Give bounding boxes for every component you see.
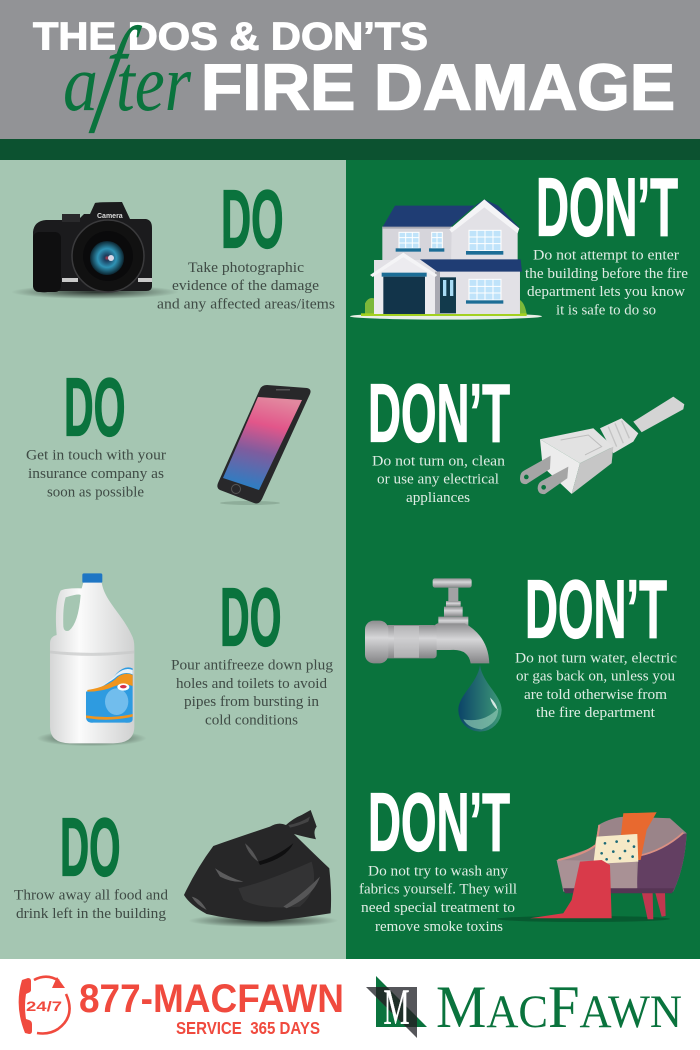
panel background: do column	[0, 160, 346, 959]
text: do not turn back on: or gas back on, unless you	[516, 668, 676, 684]
text: do not wash fabrics	[359, 864, 517, 935]
icon: camera	[11, 202, 179, 299]
icon: bottle	[37, 573, 147, 746]
text: do not turn back on	[515, 650, 678, 721]
title: THE DOS & DON’TS	[33, 16, 428, 59]
panel: don't 4 fabrics	[359, 776, 687, 935]
text: contact insurance: insurance company as	[28, 466, 164, 482]
icon: dripping faucet	[365, 578, 502, 732]
text: pour antifreeze: holes and toilets to avoid	[176, 676, 328, 692]
text: take photographic evidence: Take photographic	[188, 260, 305, 276]
logo mark	[366, 976, 427, 1038]
text: do not enter: Do not attempt to enter	[533, 248, 679, 264]
icon: 24/7 phone	[19, 977, 70, 1034]
panel: don't 1 enter building	[350, 161, 688, 320]
text: contact insurance: soon as possible	[47, 484, 144, 500]
panel: don't 2 electrical	[368, 367, 684, 506]
text: pour antifreeze: pipes from bursting in	[184, 694, 320, 710]
panel: do 3 antifreeze	[37, 571, 334, 746]
title: FIRE DAMAGE	[201, 50, 675, 124]
text: do not use appliances: Do not turn on, clean	[372, 454, 506, 470]
text: do not use appliances: or use any electrical	[377, 472, 499, 488]
text: do not wash fabrics: fabrics yourself. They will	[359, 882, 517, 898]
text: pour antifreeze	[171, 658, 334, 728]
text: do not use appliances: appliances	[406, 490, 470, 506]
icon: armchair with fabric	[497, 812, 687, 922]
text: do not wash fabrics: Do not try to wash any	[368, 864, 509, 880]
panel: do 2 insurance	[26, 361, 311, 505]
infographic canvas: DO	[60, 801, 121, 893]
icon: electrical plug	[520, 397, 684, 494]
infographic canvas: DO	[64, 361, 126, 453]
text: do not turn back on: are told otherwise from	[524, 687, 668, 703]
text: throw away food: drink left in the building	[16, 906, 167, 922]
dark green stripe	[0, 139, 700, 160]
title: a	[63, 40, 98, 128]
text: do not wash fabrics: remove smoke toxins	[375, 919, 503, 935]
text: pour antifreeze: cold conditions	[205, 712, 298, 728]
text: throw away food: Throw away all food and	[14, 888, 169, 904]
phone number text: 877-MACFAWN	[79, 977, 344, 1021]
text: do not enter: the building before the fire	[525, 266, 688, 282]
icon: garbage bag	[184, 810, 338, 927]
text: do not enter	[525, 248, 688, 318]
text: contact insurance: Get in touch with your	[26, 448, 166, 464]
title: f	[87, 2, 149, 134]
icon: smartphone	[217, 385, 311, 505]
logo wordmark: MACFAWN	[436, 974, 682, 1040]
icon: house	[350, 199, 542, 320]
icon: camera: Camera	[97, 213, 123, 220]
text: pour antifreeze: Pour antifreeze down plug	[171, 658, 334, 674]
text: throw away food	[14, 888, 169, 922]
logo mark: M	[384, 980, 410, 1036]
panel background: don't column	[346, 160, 700, 959]
footer: phone number	[19, 977, 344, 1038]
text: do not enter: it is safe to do so	[556, 302, 656, 318]
text: contact insurance	[26, 448, 166, 500]
text: do not enter: department lets you know	[527, 284, 685, 300]
title: ter	[116, 40, 192, 128]
text: take photographic evidence: and any affected areas/items	[157, 296, 335, 312]
panel: do 4 throw away food	[14, 801, 338, 927]
title	[33, 2, 675, 134]
text: do not turn back on: Do not turn water, electric	[515, 650, 678, 666]
footer: macfawn logo	[366, 974, 682, 1040]
panel: do 1 photographs	[11, 173, 335, 312]
text: do not use appliances	[372, 454, 506, 506]
service tagline: SERVICE 365 DAYS	[176, 1018, 320, 1038]
text: do not turn back on: the fire department	[536, 705, 655, 721]
text: do not wash fabrics: need special treatment to	[361, 900, 515, 916]
footer background	[0, 959, 700, 1050]
text: take photographic evidence: evidence of the damage	[172, 278, 319, 294]
icon: 24/7 phone: 24/7	[26, 999, 62, 1014]
header band	[0, 0, 700, 139]
text: take photographic evidence	[157, 260, 335, 312]
panel: don't 3 utilities	[365, 563, 678, 732]
